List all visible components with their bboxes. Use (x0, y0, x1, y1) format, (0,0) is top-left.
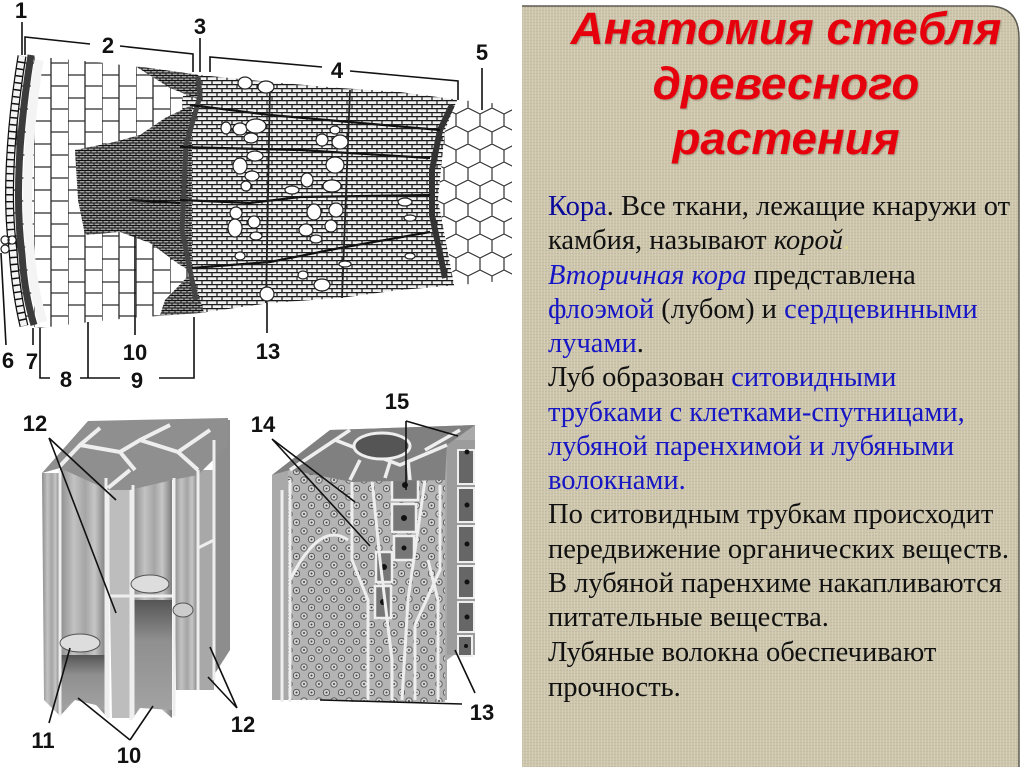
companion cells (375, 470, 418, 618)
title: Анатомия стебля (570, 3, 1001, 54)
text block: bark description: питательные вещества. (548, 602, 829, 633)
title: растения (671, 113, 900, 164)
top surface (42, 418, 228, 490)
labels: lower diagram numbers and leader lines: 11 (31, 728, 55, 753)
labels: lower diagram numbers and leader lines: 13 (470, 700, 494, 725)
labels: upper diagram numbers and leader lines: 5 (476, 40, 488, 65)
illustration: sieve tube block (42, 418, 230, 720)
text block: bark description: Вторичная кора представлена (548, 260, 916, 291)
lenticel cells (1, 236, 16, 253)
xylem vessels (221, 77, 416, 301)
text block: bark description: Кора. Все ткани, лежащие кнаружи от (548, 191, 1011, 222)
cell walls (60, 440, 214, 720)
text block: bark description (548, 191, 1011, 703)
pitted walls (350, 480, 445, 702)
cork layer (10, 56, 24, 326)
fibre strands (282, 480, 440, 702)
text block: bark description: трубками с клетками-спутницами, (548, 397, 965, 428)
cambium bands (182, 76, 200, 300)
labels: upper diagram numbers and leader lines: 6 (2, 348, 14, 373)
labels: lower diagram numbers and leader lines: 12 (231, 712, 255, 737)
pith (438, 98, 515, 285)
labels: upper diagram numbers and leader lines: 8 (60, 367, 72, 392)
text block: bark description: волокнами. (548, 465, 686, 496)
labels: upper diagram numbers and leader lines: 4 (331, 58, 344, 83)
chart: stem cross-section micrograph (0, 40, 515, 340)
labels: upper diagram numbers and leader lines: 13 (256, 339, 280, 364)
text block: bark description: прочность. (548, 672, 681, 703)
labels: upper diagram numbers and leader lines: 3 (194, 14, 206, 39)
cell columns (42, 473, 60, 716)
text block: bark description: лучами. (548, 328, 644, 359)
labels: upper diagram numbers and leader lines: 9 (131, 368, 143, 393)
text block: bark description: лубяной паренхимой и лубяными (548, 431, 954, 462)
labels: lower diagram numbers and leader lines (23, 389, 494, 767)
labels: upper diagram numbers and leader lines: 7 (26, 349, 38, 374)
top surface (272, 425, 475, 482)
text block: bark description: По ситовидным трубкам происходит (548, 499, 994, 530)
text block: bark description: Лубяные волокна обеспечивают (548, 637, 937, 668)
panel: text background (522, 6, 1019, 767)
title (570, 3, 1001, 164)
cork cambium band (19, 55, 34, 325)
labels: upper diagram numbers and leader lines (1, 0, 488, 393)
medullary rays (130, 105, 440, 268)
tube with pits (288, 470, 350, 700)
phloem mesh (75, 105, 192, 272)
text block: bark description: В лубяной паренхиме накапливаются (548, 568, 1002, 599)
text block: bark description: камбия, называют корой. (548, 225, 850, 256)
lower dark chambers (60, 655, 106, 712)
dark side cells (458, 450, 474, 656)
xylem zone (182, 70, 458, 316)
parenchyma cells (14, 56, 188, 328)
labels: upper diagram numbers and leader lines: 10 (123, 340, 147, 365)
labels: lower diagram numbers and leader lines: 12 (23, 411, 47, 436)
sieve plates (60, 634, 100, 652)
labels: lower diagram numbers and leader lines: 15 (385, 389, 409, 414)
illustration: phloem parenchyma block (272, 425, 475, 702)
text block: bark description: передвижение органических веществ. (548, 534, 1009, 565)
text block: bark description: Луб образован ситовидными (548, 362, 896, 393)
nuclei (380, 450, 470, 648)
labels: lower diagram numbers and leader lines: 14 (251, 412, 276, 437)
title: древесного (653, 58, 919, 109)
text block: bark description: флоэмой (лубом) и сердцевинными (548, 294, 978, 325)
labels: upper diagram numbers and leader lines: 2 (102, 33, 114, 58)
